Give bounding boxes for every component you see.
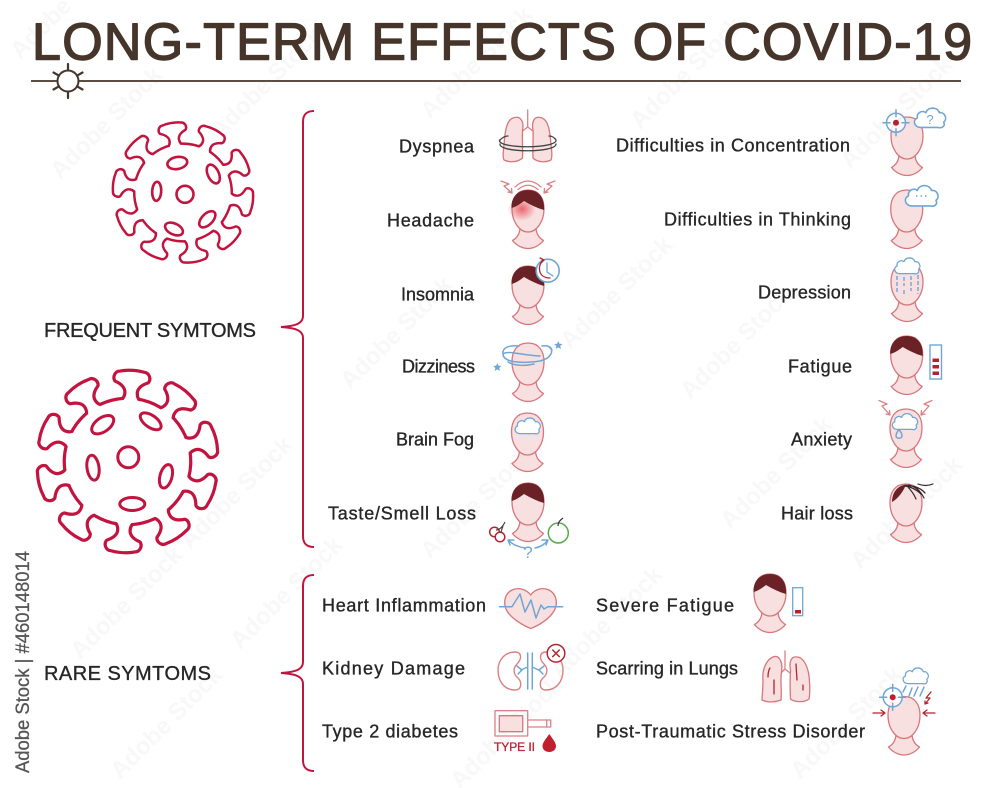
icon: glucose meter and blood drop: TYPE II — [494, 740, 535, 754]
heading: rare symptoms: RARE SYMTOMS — [44, 663, 211, 685]
label: dizziness: Dizziness — [402, 356, 475, 376]
label: severe fatigue: Severe Fatigue — [596, 596, 734, 616]
faint watermark: Adobe Stock — [205, 21, 328, 144]
icon: kidneys with cross — [498, 644, 565, 690]
faint watermark: Adobe Stock — [65, 541, 188, 664]
faint watermark: Adobe Stock — [715, 411, 838, 534]
icon: hair loss head — [890, 484, 933, 542]
icon: taste and smell head with fruits: ? — [523, 543, 533, 562]
faint watermark: Adobe Stock — [415, 441, 538, 564]
label: hair loss: Hair loss — [781, 504, 853, 524]
label: taste and smell loss: Taste/Smell Loss — [328, 504, 476, 524]
faint watermark: Adobe Stock — [845, 451, 968, 574]
faint watermark: Adobe Stock — [175, 431, 298, 554]
label: heart inflammation: Heart Inflammation — [322, 596, 486, 616]
label: anxiety: Anxiety — [791, 430, 852, 450]
label: fatigue: Fatigue — [788, 356, 852, 376]
faint watermark: Adobe Stock — [835, 51, 958, 174]
icon: concentration head — [883, 108, 946, 176]
title rule with sun icon — [31, 64, 961, 98]
label: difficulties in concentration: Difficulties in Concentration — [616, 136, 850, 156]
icon: anxiety head — [879, 400, 932, 468]
icon: brain fog head — [512, 413, 544, 472]
faint watermark: Adobe Stock — [105, 661, 228, 784]
icon: depression head — [891, 258, 923, 322]
brace: frequent symptoms — [281, 111, 314, 547]
faint watermark: Adobe Stock — [45, 61, 168, 184]
label: scarring in lungs: Scarring in Lungs — [596, 658, 738, 678]
faint watermark: Adobe Stock — [785, 661, 908, 784]
icon: headache head — [501, 181, 555, 248]
label: dyspnea: Dyspnea — [399, 136, 475, 156]
heading: frequent symptoms: FREQUENT SYMTOMS — [44, 320, 256, 342]
icon: upper virus — [103, 113, 263, 272]
faint watermark: Adobe Stock — [335, 271, 458, 394]
label: headache: Headache — [387, 210, 474, 230]
label: depression: Depression — [758, 282, 851, 302]
icon: taste and smell head with fruits — [490, 483, 568, 562]
title: LONG-TERM EFFECTS OF COVID-19 — [32, 14, 972, 72]
label: type 2 diabetes: Type 2 diabetes — [322, 722, 458, 742]
icon: dizziness head with rings and stars — [493, 341, 562, 402]
icon: insomnia head with clock — [511, 258, 559, 324]
label: kidney damage: Kidney Damage — [322, 658, 465, 678]
icon: heart with ecg — [500, 589, 563, 628]
icon: lungs with band — [499, 110, 556, 162]
faint watermark: Adobe Stock — [545, 561, 668, 684]
faint watermark: Adobe Stock — [675, 281, 798, 404]
label: difficulties in thinking: Difficulties in Thinking — [664, 210, 851, 230]
icon: concentration head: ? — [926, 112, 934, 127]
icon: fatigue head and battery — [890, 336, 942, 394]
icon: lower virus — [33, 367, 222, 556]
icon: thinking head — [891, 186, 938, 248]
icon: severe fatigue head and battery — [753, 574, 803, 632]
brace: rare symptoms — [281, 575, 314, 771]
faint watermark: Adobe Stock — [225, 531, 348, 654]
side credit text: Adobe Stock | #460148014 — [12, 551, 34, 773]
icon: ptsd head — [873, 668, 935, 755]
faint watermark: Adobe Stock — [625, 11, 748, 134]
label: brain fog: Brain Fog — [396, 430, 474, 450]
icon: scarred lungs — [762, 651, 810, 702]
faint watermark: Adobe Stock — [555, 231, 678, 354]
faint watermark: Adobe Stock — [415, 1, 538, 124]
icon: glucose meter and blood drop — [494, 711, 556, 754]
label: post-traumatic stress disorder: Post-Traumatic Stress Disorder — [596, 722, 865, 742]
label: insomnia: Insomnia — [401, 284, 475, 304]
